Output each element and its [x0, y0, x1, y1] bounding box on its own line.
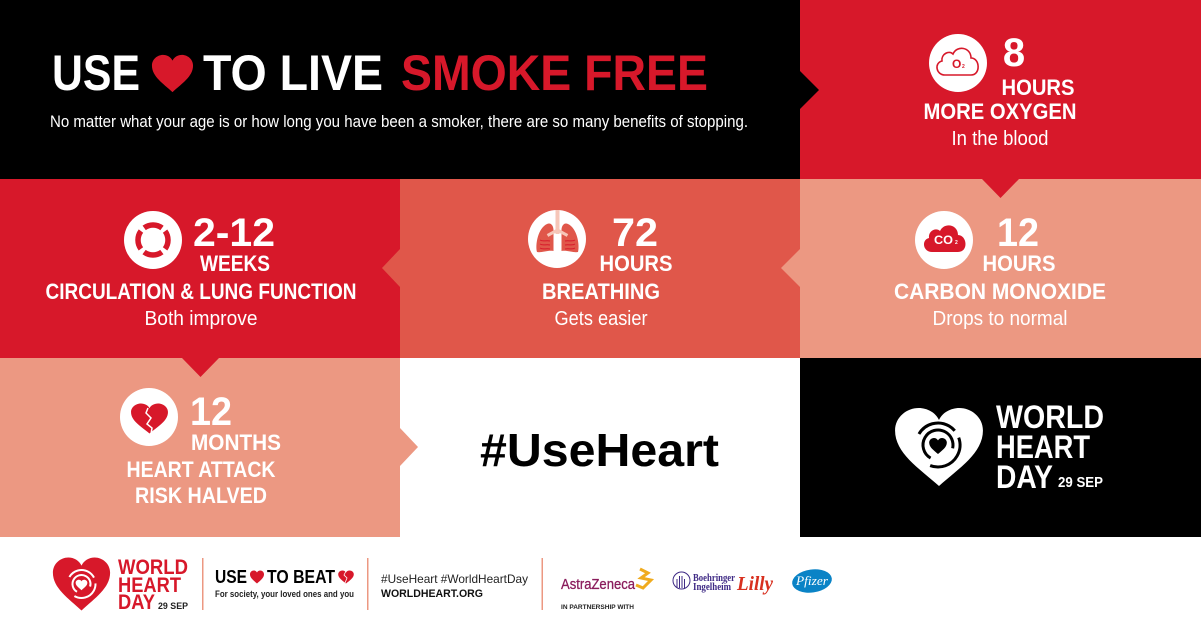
partner: AstraZeneca: [561, 569, 651, 593]
partner: AstraZeneca: AstraZeneca: [561, 576, 636, 593]
icon: broken heart: [120, 388, 178, 446]
footer logo: world heart day: WORLD: [118, 556, 188, 579]
footer hashtags: WORLDHEART.ORG: [381, 588, 483, 600]
icon: lungs: [528, 210, 586, 268]
panel: 72 hours: [400, 179, 800, 358]
icon: O2 cloud: 2: [962, 64, 965, 70]
stat: 2-12 weeks: [193, 211, 275, 276]
text: in the blood: In the blood: [952, 128, 1048, 150]
stat: 12 hours: [982, 211, 1056, 276]
panel: world heart day: [800, 358, 1201, 537]
stat: 12 months: MONTHS: [191, 430, 281, 455]
title: [52, 45, 708, 101]
logo: wordmark: WORLD: [996, 399, 1104, 435]
footer hashtags: #UseHeart #WorldHeartDay: [381, 572, 528, 586]
stat: 12 months: [190, 390, 281, 455]
footer logo: world heart day: 29 SEP: [158, 601, 188, 611]
stat: 8 hours: HOURS: [1002, 75, 1074, 100]
footer hashtags: [381, 572, 528, 600]
stat: 72 hours: HOURS: [600, 251, 672, 276]
stat: 12 hours: 12: [997, 211, 1039, 255]
stat: 12 months: 12: [190, 390, 232, 434]
footer logo: world heart day: HEART: [118, 574, 181, 597]
panel: title block: [0, 0, 800, 179]
label: circulation and lung function: CIRCULATION & LUNG FUNCTION: [46, 279, 356, 304]
label: heart attack risk halved: RISK HALVED: [135, 483, 267, 508]
partner: Pfizer: [791, 567, 833, 595]
logo: wordmark: HEART: [996, 429, 1090, 465]
divider: [202, 558, 204, 610]
arrow: left from 12 hours: [781, 249, 800, 287]
arrow: down from 8 hours: [982, 179, 1019, 198]
divider: [367, 558, 368, 610]
stat: 8 hours: [1002, 31, 1074, 100]
text: drops to normal: Drops to normal: [932, 308, 1068, 330]
icon: circulation: [124, 211, 182, 269]
logo: wordmark: 29 SEP: [1058, 475, 1103, 491]
footer slogan: [215, 567, 354, 599]
text: gets easier: Gets easier: [554, 308, 648, 330]
logo: wordmark: DAY: [996, 459, 1053, 495]
panel: 12 months: [0, 358, 400, 537]
title: USE: [52, 45, 140, 101]
icon: O2 cloud: [929, 34, 987, 92]
icon: O2 cloud: O: [952, 57, 961, 71]
text: both improve: Both improve: [144, 308, 258, 330]
label: heart attack risk halved: HEART ATTACK: [126, 457, 276, 482]
arrow: from title block: [800, 71, 819, 109]
logo: white heart: [895, 408, 983, 486]
footer slogan: USE: [215, 567, 247, 587]
label: breathing: BREATHING: [542, 279, 660, 304]
label: heart attack risk halved: [126, 457, 276, 508]
partner: Lilly: Lilly: [736, 573, 773, 595]
partner: Boehringer Ingelheim: Ingelheim: [693, 582, 732, 593]
partner: Boehringer Ingelheim: [673, 572, 735, 593]
footer slogan: TO BEAT: [267, 567, 335, 587]
arrow: left from 72 hours: [382, 249, 400, 287]
stat: 72 hours: [600, 211, 672, 276]
icon: CO2 cloud: CO: [934, 233, 953, 247]
stat: 72 hours: 72: [612, 211, 658, 255]
subtitle: No matter what your age is or how long you have been a smoker, there are so many benefits of stopping.: [50, 112, 748, 131]
footer logo: world heart day: DAY: [118, 591, 155, 614]
partner: Boehringer Ingelheim: Boehringer: [693, 573, 735, 584]
stat: 2-12 weeks: WEEKS: [200, 251, 270, 276]
title: TO LIVE: [203, 45, 383, 101]
panel: 2-12 weeks: [0, 179, 400, 358]
partner: Pfizer: Pfizer: [795, 573, 829, 588]
stat: 12 hours: HOURS: [982, 251, 1056, 276]
arrow: down from 2-12 weeks: [182, 358, 219, 377]
panel: 8 hours: [800, 0, 1201, 179]
stat: 2-12 weeks: 2-12: [193, 211, 275, 255]
hashtag: #UseHeart: [480, 424, 719, 476]
footer slogan: For society, your loved ones and you: [215, 589, 354, 599]
footer logo: world heart day: [53, 556, 188, 614]
icon: CO2 cloud: 2: [955, 240, 958, 246]
label: carbon monoxide: CARBON MONOXIDE: [894, 279, 1106, 304]
panel: 12 hours: [800, 179, 1201, 358]
panel: hashtag: [400, 358, 800, 537]
title: SMOKE FREE: [401, 45, 708, 101]
logo: wordmark: [996, 399, 1104, 495]
partner caption: IN PARTNERSHIP WITH: [561, 605, 634, 611]
arrow: right from 12 months: [400, 428, 418, 466]
footer: [53, 556, 833, 614]
stat: 8 hours: 8: [1003, 31, 1025, 75]
divider: [542, 558, 543, 610]
label: more oxygen: MORE OXYGEN: [924, 99, 1076, 124]
icon: CO2 cloud: [915, 211, 973, 269]
